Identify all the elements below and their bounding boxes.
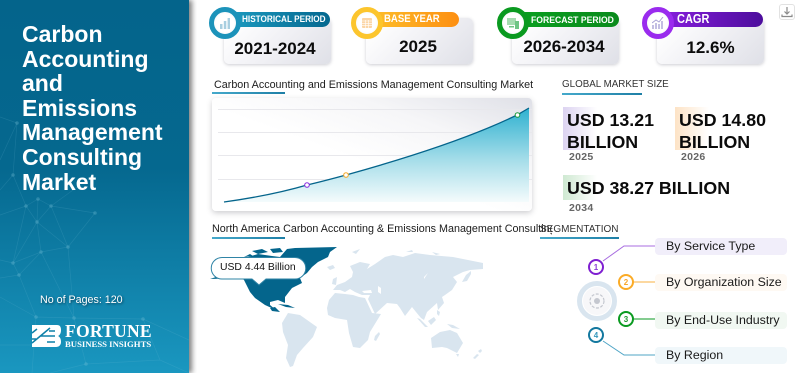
panel: market size 2025 — [563, 107, 654, 163]
label: CAGR — [677, 12, 709, 26]
panel: base year — [351, 7, 474, 66]
heading: global market size: GLOBAL MARKET SIZE — [562, 79, 669, 90]
heading: segmentation: SEGMENTATION — [540, 224, 619, 235]
title: Emissions — [22, 95, 137, 121]
card body — [512, 18, 619, 64]
icon: forecast screen — [497, 7, 529, 39]
label: BASE YEAR — [384, 13, 440, 25]
segment: By Service Type — [655, 238, 787, 255]
year: 2026 — [681, 151, 706, 163]
hub icon — [580, 284, 614, 318]
value: 12.6% — [686, 38, 735, 57]
title: and — [22, 70, 63, 96]
value: 2026-2034 — [523, 37, 605, 56]
segment: By End-Use Industry: By End-Use Industry — [666, 313, 780, 327]
logo subtitle: BUSINESS INSIGHTS — [65, 339, 151, 349]
panel: market size 2026 — [675, 107, 766, 163]
badge 3 — [619, 312, 633, 326]
badge 1: 1 — [594, 263, 599, 272]
panel: market size 2034 — [563, 175, 730, 214]
North America highlighted — [210, 247, 337, 312]
segment: By Region — [655, 347, 787, 364]
value: BILLION — [679, 132, 750, 152]
page count: No of Pages: 120 — [40, 294, 123, 306]
title: Consulting — [22, 144, 142, 170]
card body — [366, 18, 473, 64]
pill header — [657, 12, 763, 27]
marker: 2026 — [344, 173, 348, 177]
value: 2021-2024 — [234, 39, 316, 58]
callout text: USD 4.44 Billion — [220, 262, 296, 273]
icon: bar chart — [209, 7, 241, 39]
chart: world map — [210, 247, 483, 367]
trend line — [224, 108, 529, 202]
segment: By Service Type: By Service Type — [666, 239, 755, 253]
pill header — [513, 12, 619, 27]
badge 2: 2 — [624, 278, 629, 287]
title: Management — [22, 119, 163, 145]
label: FORECAST PERIOD — [531, 14, 614, 25]
area under curve — [224, 108, 529, 202]
panel: historical period — [209, 7, 332, 66]
segment: By Region: By Region — [666, 348, 723, 362]
panel: left sidebar — [0, 0, 189, 373]
connectors — [577, 246, 655, 356]
icon: calendar — [351, 7, 383, 39]
rest of world — [282, 249, 483, 367]
icon: growth chart — [642, 7, 674, 39]
card body — [224, 18, 331, 64]
callout: North America value — [210, 257, 306, 286]
value: USD 14.80 — [679, 110, 766, 130]
chart: market growth curve — [212, 98, 532, 211]
badge 4: 4 — [594, 331, 599, 340]
value — [679, 110, 766, 152]
panel: forecast period — [497, 7, 620, 66]
segment: By Organization Size: By Organization Size — [666, 275, 782, 289]
marker: 2025 — [305, 183, 309, 187]
value: USD 38.27 BILLION — [567, 178, 730, 198]
pill header — [367, 12, 459, 27]
background network pattern — [0, 116, 189, 373]
title: Market — [22, 169, 96, 195]
icon: logo mark — [32, 325, 61, 347]
heading: market chart: Carbon Accounting and Emissions Management Consulting Market — [214, 79, 533, 91]
logo: Fortune Business Insights — [32, 321, 152, 349]
year: 2025 — [569, 151, 594, 163]
icon: download button — [779, 4, 795, 20]
year: 2034 — [569, 202, 594, 214]
card body — [657, 18, 764, 64]
badge 1 — [589, 260, 603, 274]
value: 2025 — [399, 37, 437, 56]
marker: 2034 — [515, 113, 520, 117]
badge 2 — [619, 275, 633, 289]
title: Carbon — [22, 21, 102, 47]
value: USD 13.21 — [567, 110, 654, 130]
inland seas — [362, 273, 428, 294]
value: BILLION — [567, 132, 638, 152]
label: HISTORICAL PERIOD — [242, 14, 326, 24]
title: Accounting — [22, 46, 148, 72]
logo wordmark: FORTUNE — [65, 321, 152, 341]
panel: CAGR — [642, 7, 766, 66]
value — [567, 110, 654, 152]
badge 4 — [589, 328, 603, 342]
diagram: segmentation — [577, 246, 655, 356]
pill header — [225, 12, 330, 27]
badge 3: 3 — [624, 315, 629, 324]
title — [22, 21, 163, 195]
